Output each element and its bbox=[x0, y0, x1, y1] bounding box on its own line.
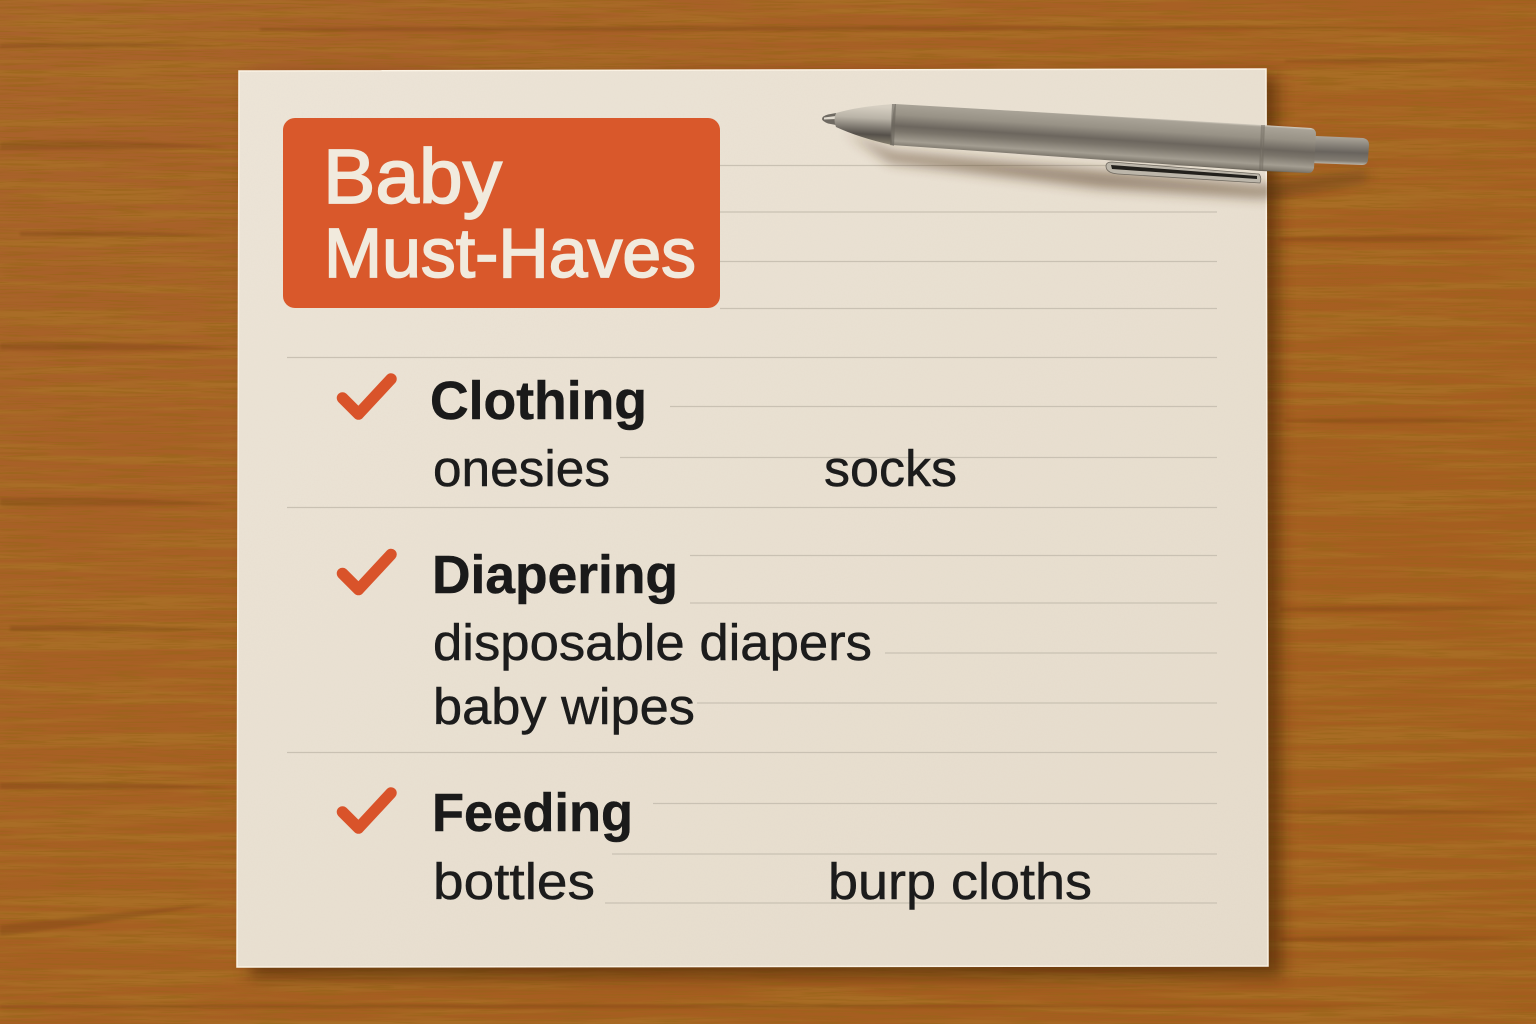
heading: Feeding: Feeding bbox=[432, 783, 633, 843]
pen clip bbox=[1106, 162, 1261, 183]
heading: Diapering: Diapering bbox=[432, 545, 678, 605]
panel: checklist note paper bbox=[237, 69, 1268, 967]
title: Must-Haves: Must-Haves bbox=[324, 214, 696, 292]
item: socks: socks bbox=[824, 440, 957, 497]
title banner bbox=[283, 118, 720, 308]
section: feeding bbox=[342, 783, 1092, 910]
pen shadow bbox=[845, 132, 1368, 198]
icon: check mark bbox=[342, 793, 391, 828]
title: Baby: Baby bbox=[323, 134, 502, 220]
item: bottles: bottles bbox=[433, 853, 595, 910]
icon: metal pen bbox=[822, 104, 1369, 183]
icon: check mark bbox=[342, 379, 391, 414]
heading: Clothing: Clothing bbox=[430, 371, 647, 431]
item: baby wipes: baby wipes bbox=[433, 678, 695, 735]
item: onesies: onesies bbox=[433, 440, 610, 497]
section: diapering bbox=[342, 545, 872, 735]
item: burp cloths: burp cloths bbox=[828, 853, 1092, 910]
section: clothing bbox=[342, 371, 957, 497]
icon: check mark bbox=[342, 554, 391, 590]
paper shadow bbox=[250, 76, 1282, 977]
item: disposable diapers: disposable diapers bbox=[433, 614, 872, 671]
